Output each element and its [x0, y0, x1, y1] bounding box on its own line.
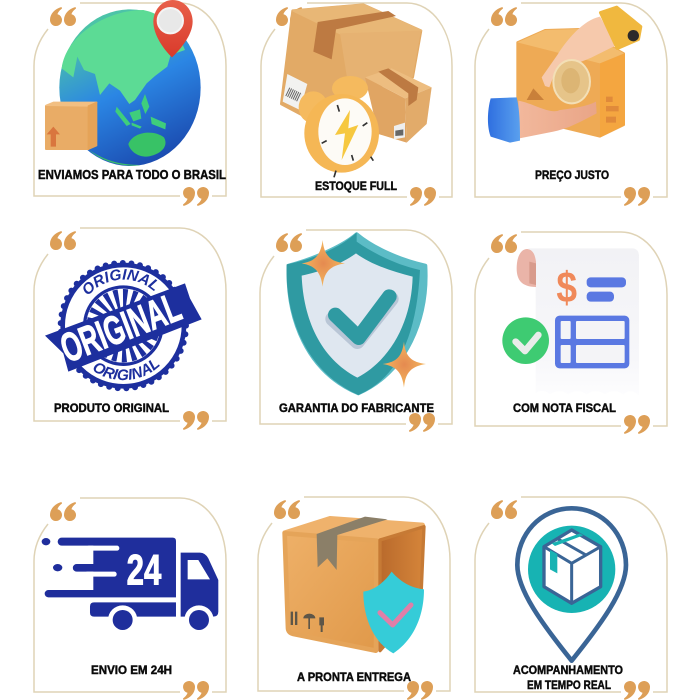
illustration: delivery truck: 24 [127, 547, 162, 595]
icon: close quote [624, 187, 650, 206]
frame [475, 497, 667, 692]
icon: close quote [183, 187, 209, 206]
icon: close quote [624, 415, 650, 434]
label: PRODUTO ORIGINAL [54, 401, 169, 415]
panel: envio em 24h [34, 498, 226, 700]
icon: close quote [409, 413, 435, 432]
icon: close quote [624, 681, 650, 700]
panel: com nota fiscal [475, 232, 667, 434]
icon: open quote [50, 7, 76, 26]
frame [261, 3, 452, 197]
illustration: shield with check [287, 232, 426, 395]
illustration: boxes and alarm clock [281, 5, 432, 177]
frame [260, 230, 452, 424]
illustration: hands, coin and box [488, 7, 641, 143]
icon: open quote [50, 231, 76, 250]
frame [475, 232, 667, 426]
frame [475, 3, 667, 197]
illustration: delivery truck [42, 538, 218, 635]
panel: garantia do fabricante [260, 230, 452, 432]
frame [34, 498, 226, 692]
illustration: location pin with box [517, 508, 626, 661]
frame [34, 228, 226, 421]
panel: produto original [33, 227, 227, 430]
illustration: original stamp: ORIGINAL [83, 269, 158, 294]
label: ENVIO EM 24H [91, 663, 172, 677]
label: ENVIAMOS PARA TODO O BRASIL [38, 168, 226, 182]
panel: estoque full [261, 3, 452, 206]
icon: close quote [410, 187, 436, 206]
icon: open quote [276, 7, 302, 26]
icon: close quote [183, 411, 209, 430]
icon: close quote [183, 681, 209, 700]
illustration: box with shield [285, 517, 424, 653]
label: A PRONTA ENTREGA [297, 670, 411, 684]
frame [34, 3, 226, 196]
icon: open quote [491, 234, 517, 253]
icon: open quote [274, 500, 300, 519]
icon: open quote [276, 233, 302, 252]
label: ESTOQUE FULL [315, 181, 397, 193]
label: PREÇO JUSTO [535, 168, 609, 182]
label: GARANTIA DO FABRICANTE [279, 401, 434, 415]
panel: preço justo [475, 3, 667, 206]
illustration: receipt with check [502, 248, 639, 396]
label: acompanhamento: ACOMPANHAMENTO [513, 663, 623, 677]
frame [258, 497, 450, 691]
illustration: receipt with check: $ [556, 264, 577, 313]
illustration: original stamp: ORIGINAL [94, 360, 160, 380]
panel: a pronta entrega [258, 497, 450, 700]
icon: open quote [491, 500, 517, 519]
icon: open quote [50, 502, 76, 521]
icon: close quote [407, 681, 433, 700]
illustration: globe with pin and box [46, 0, 201, 166]
label: em tempo real: EM TEMPO REAL [527, 678, 611, 692]
panel: enviamos para todo o Brasil [34, 0, 226, 206]
icon: open quote [491, 7, 517, 26]
label: COM NOTA FISCAL [513, 401, 616, 415]
illustration: original stamp: ORIGINAL [54, 284, 187, 371]
illustration: original stamp [45, 260, 202, 392]
panel: acompanhamento em tempo real [475, 497, 667, 700]
